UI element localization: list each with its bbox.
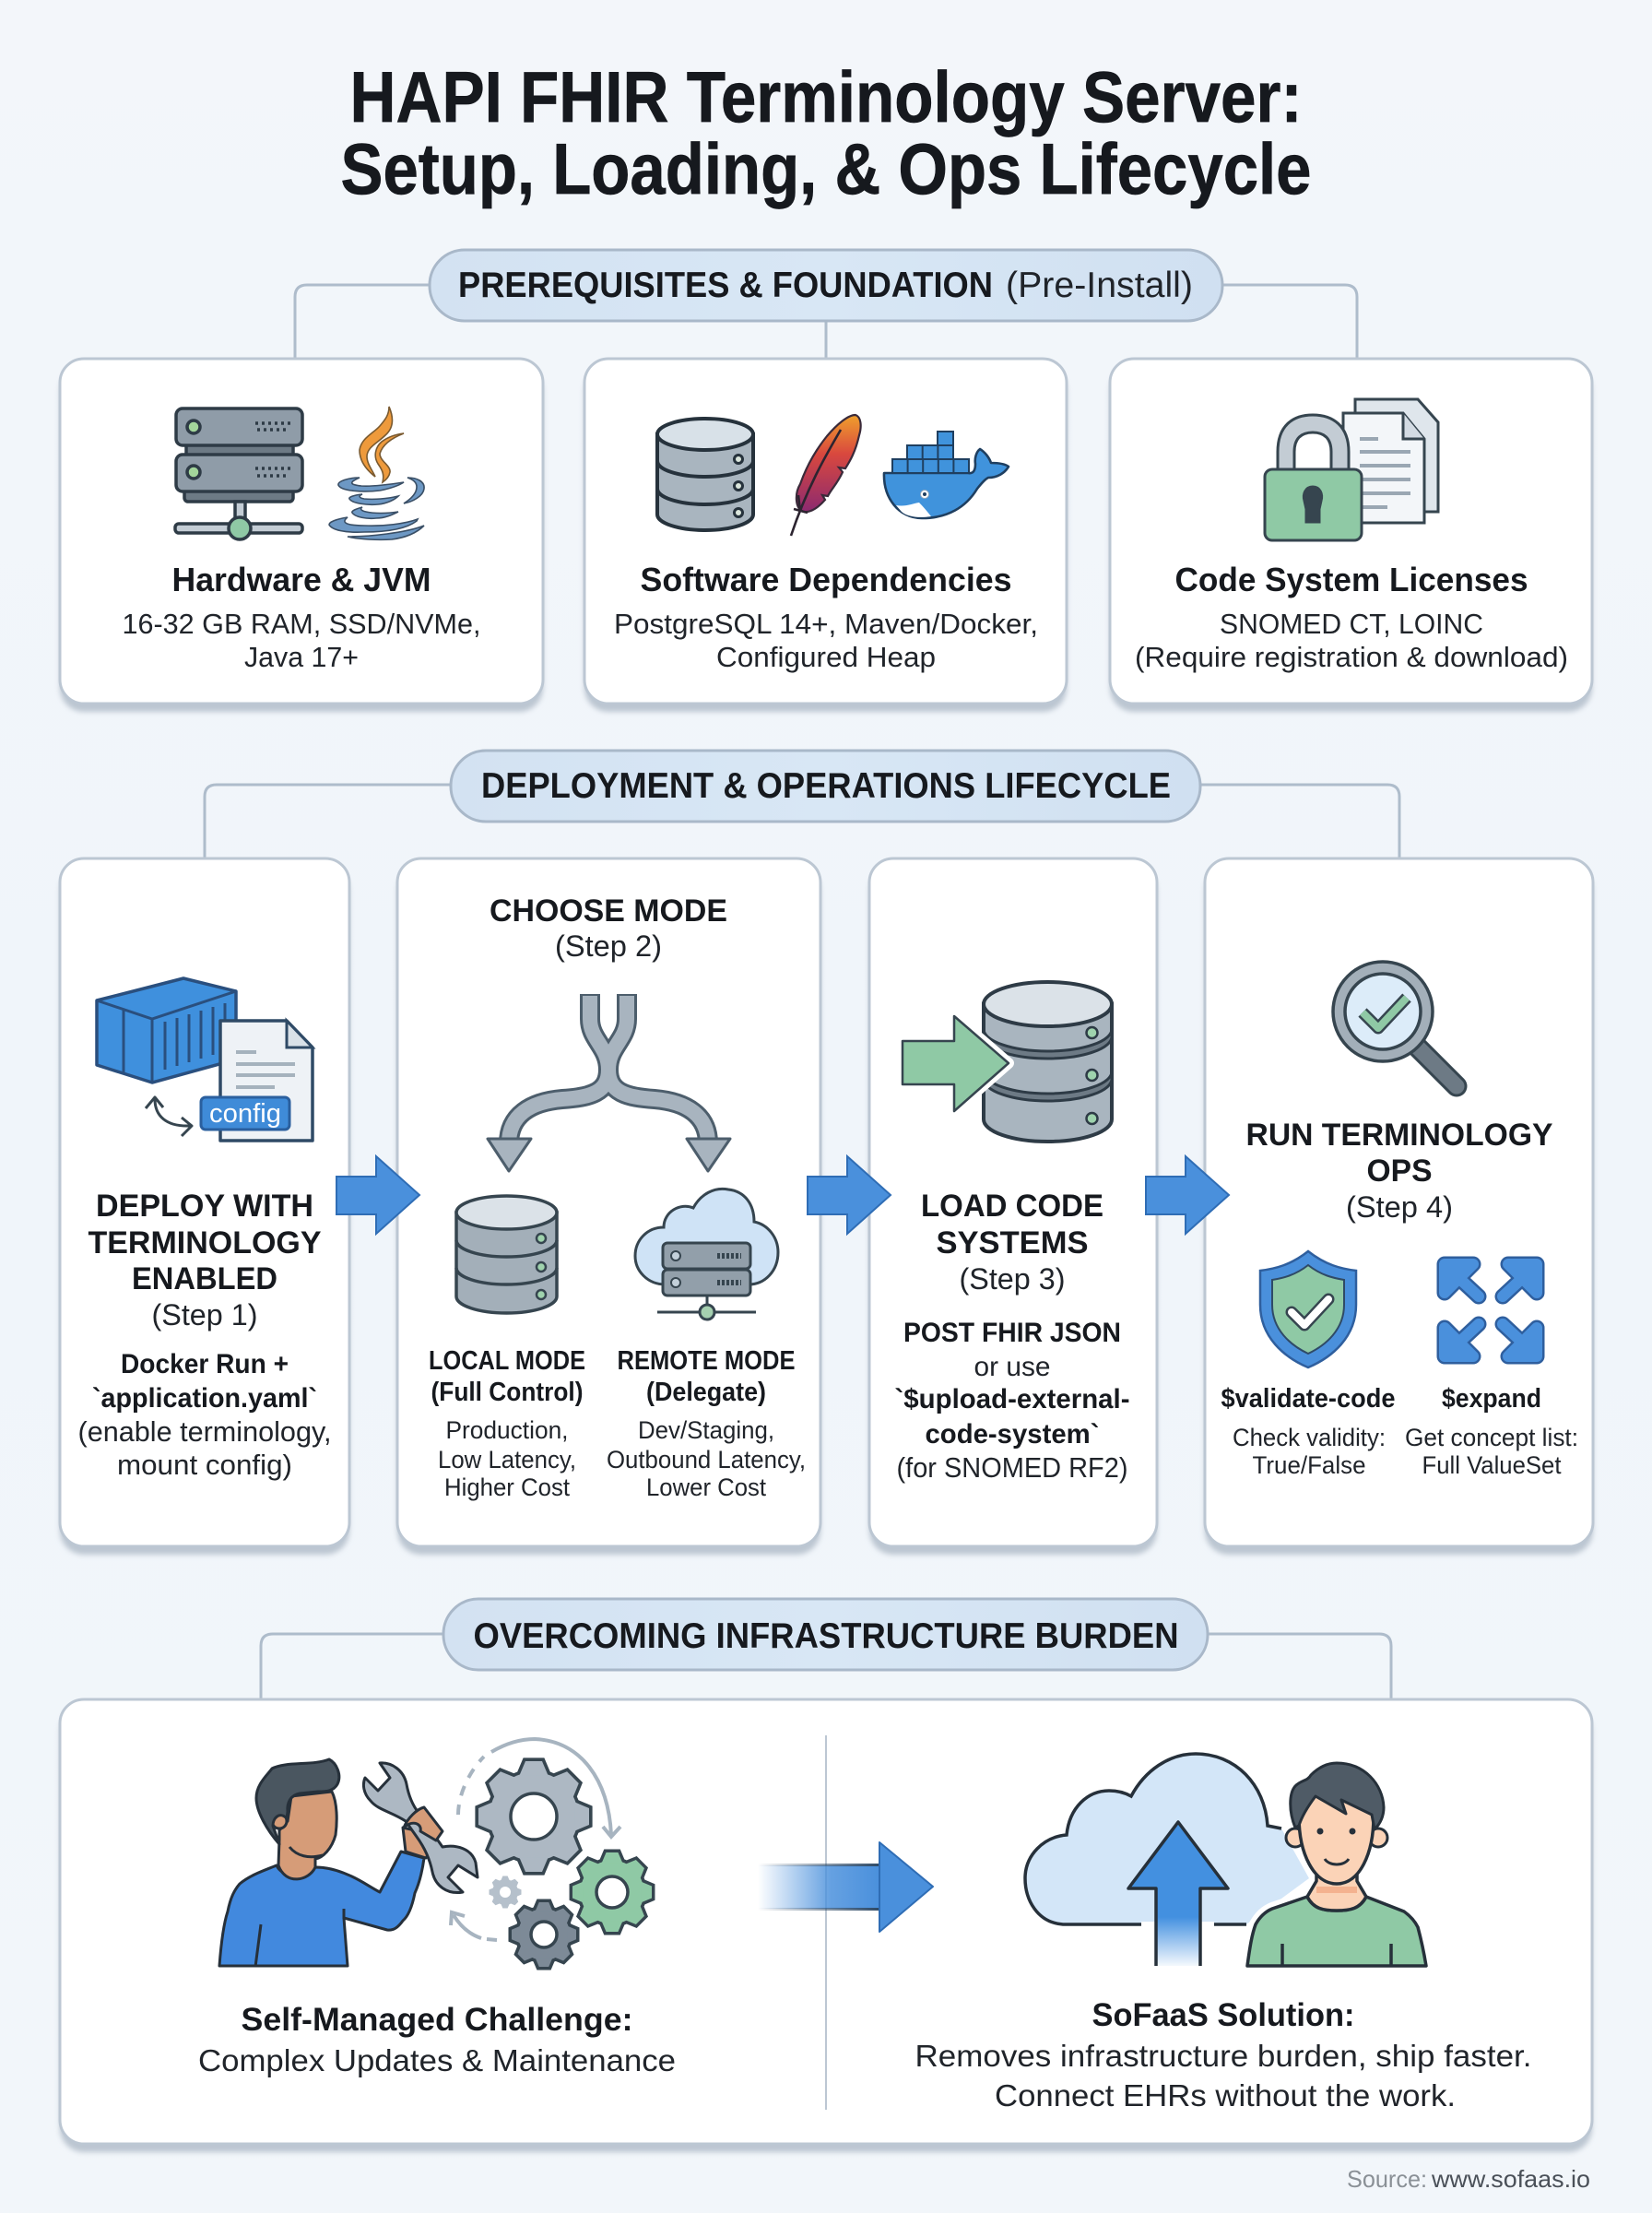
card text: remote mode [607, 1346, 806, 1501]
card heading: choose mode [490, 893, 727, 963]
source credit: Source: [1347, 2165, 1427, 2193]
text: self-managed challenge: Complex Updates & Maintenance [198, 2043, 676, 2077]
icon: expand arrows [1445, 1264, 1537, 1356]
connector: prerequisites [295, 285, 1357, 359]
text: SoFaaS solution [914, 1997, 1532, 2112]
card text: deploy: DEPLOY WITH [96, 1189, 313, 1224]
arrow: challenge to solution [758, 1842, 933, 1932]
card text: software [614, 561, 1038, 673]
icon: padlock [1265, 415, 1362, 540]
card text: load: code-system` [926, 1419, 1099, 1450]
icon: forked arrow [488, 994, 730, 1171]
card heading: choose mode: CHOOSE MODE [490, 893, 727, 929]
card text: load [894, 1189, 1130, 1484]
arrow: step 2 to 3 [808, 1156, 891, 1234]
card text: software: PostgreSQL 14+, Maven/Docker, [614, 608, 1038, 640]
icon: documents [1343, 399, 1438, 523]
card text: local mode: (Full Control) [431, 1378, 583, 1407]
icon: docker whale [884, 432, 1009, 518]
card text: local mode: Higher Cost [444, 1473, 570, 1501]
card text: expand [1405, 1384, 1578, 1479]
card text: hardware: Java 17+ [244, 641, 359, 673]
heading: prerequisites pill [430, 250, 1222, 321]
connector: infrastructure [261, 1634, 1391, 1699]
text: SoFaaS solution: Connect EHRs without the work. [995, 2078, 1456, 2112]
card text: load: or use [974, 1352, 1051, 1382]
card text: local mode [429, 1346, 585, 1501]
icon: person with wrench [219, 1759, 478, 1967]
panel: step 4 run terminology ops [1205, 858, 1593, 1555]
title: Setup, Loading, & Ops Lifecycle [341, 128, 1311, 209]
panel: infrastructure burden [60, 1699, 1592, 2152]
card text: deploy: (enable terminology, [77, 1415, 332, 1448]
card heading: run ops: (Step 4) [1346, 1190, 1453, 1224]
icon: cloud with upload arrow [1025, 1754, 1309, 1966]
card text: remote mode: REMOTE MODE [618, 1346, 795, 1376]
icon: maintenance gears [451, 1739, 652, 1967]
card text: licenses [1135, 561, 1568, 673]
title [341, 56, 1311, 209]
card heading: run ops: RUN TERMINOLOGY [1246, 1118, 1553, 1153]
heading: infrastructure pill: OVERCOMING INFRASTRUCTURE BURDEN [474, 1616, 1178, 1656]
card text: load: (for SNOMED RF2) [896, 1451, 1128, 1484]
card text: load: LOAD CODE [921, 1189, 1103, 1224]
card text: deploy: (Step 1) [151, 1298, 258, 1331]
card text: deploy [77, 1189, 332, 1481]
card text: remote mode: (Delegate) [646, 1378, 766, 1407]
icon: java [329, 407, 424, 539]
card heading: run ops: OPS [1366, 1154, 1433, 1189]
card text: deploy: mount config) [117, 1449, 292, 1481]
icon: happy person [1247, 1763, 1426, 1966]
card text: licenses: SNOMED CT, LOINC [1220, 608, 1483, 640]
card text: hardware [122, 561, 481, 673]
icon: remote cloud server [635, 1189, 778, 1320]
text: SoFaaS solution: Removes infrastructure burden, ship faster. [914, 2039, 1532, 2073]
card text: remote mode: Outbound Latency, [607, 1446, 806, 1473]
card text: deploy: `application.yaml` [92, 1383, 317, 1414]
icon: local database [456, 1196, 557, 1313]
card text: load: POST FHIR JSON [903, 1318, 1121, 1348]
icon: container with config: config [209, 1099, 281, 1129]
card text: load: SYSTEMS [937, 1225, 1088, 1260]
card text: hardware: Hardware & JVM [171, 561, 431, 598]
card text: remote mode: Dev/Staging, [638, 1416, 774, 1444]
card text: remote mode: Lower Cost [646, 1473, 766, 1501]
text: SoFaaS solution: SoFaaS Solution: [1092, 1997, 1355, 2033]
card text: local mode: Production, [446, 1416, 568, 1444]
connector: lifecycle [205, 785, 1399, 858]
card text: hardware: 16-32 GB RAM, SSD/NVMe, [122, 608, 481, 640]
card heading: choose mode: (Step 2) [555, 929, 662, 963]
card text: deploy: ENABLED [132, 1261, 277, 1296]
text: self-managed challenge [198, 2002, 676, 2077]
card text: licenses: Code System Licenses [1174, 561, 1528, 598]
heading: lifecycle pill [451, 751, 1200, 822]
panel: hardware and JVM [60, 359, 543, 712]
heading: lifecycle pill: DEPLOYMENT & OPERATIONS LIFECYCLE [481, 766, 1171, 806]
card text: validate-code: $validate-code [1221, 1384, 1396, 1414]
card text: load: (Step 3) [959, 1262, 1066, 1296]
icon: shield [1260, 1251, 1356, 1367]
heading: infrastructure pill [443, 1599, 1208, 1670]
title: HAPI FHIR Terminology Server: [350, 56, 1302, 137]
card text: expand: $expand [1442, 1384, 1541, 1414]
icon: database [657, 419, 753, 530]
arrow: step 3 to 4 [1146, 1156, 1229, 1234]
panel: step 1 deploy [60, 858, 349, 1555]
card text: software: Software Dependencies [640, 561, 1012, 598]
card text: local mode: Low Latency, [438, 1446, 576, 1473]
panel: step 3 load code systems [869, 858, 1157, 1555]
card text: software: Configured Heap [716, 641, 936, 673]
card text: load: `$upload-external- [894, 1384, 1130, 1414]
arrow: step 1 to 2 [336, 1156, 419, 1234]
text: self-managed challenge: Self-Managed Challenge: [242, 2002, 632, 2038]
heading: prerequisites pill: PREREQUISITES & FOUNDATION [458, 266, 993, 305]
icon: container with config [97, 978, 313, 1141]
icon: server [175, 408, 302, 539]
card text: validate-code [1221, 1384, 1396, 1479]
icon: load into database [903, 982, 1112, 1142]
panel: software dependencies [584, 359, 1067, 712]
card text: validate-code: True/False [1252, 1451, 1366, 1479]
card text: licenses: (Require registration & download) [1135, 641, 1568, 673]
card text: validate-code: Check validity: [1233, 1424, 1386, 1451]
heading: prerequisites pill: (Pre-Install) [1006, 266, 1193, 305]
icon: magnifier [1333, 962, 1457, 1086]
panel: step 2 choose mode [397, 858, 820, 1555]
card text: expand: Full ValueSet [1422, 1451, 1562, 1479]
card text: deploy: Docker Run + [121, 1349, 289, 1379]
source credit [1347, 2165, 1590, 2193]
card text: deploy: TERMINOLOGY [88, 1225, 322, 1260]
card text: local mode: LOCAL MODE [429, 1346, 585, 1376]
source credit: www.sofaas.io [1431, 2165, 1590, 2193]
card text: expand: Get concept list: [1405, 1424, 1578, 1451]
icon: feather [791, 415, 861, 536]
panel: code system licenses [1110, 359, 1592, 712]
card heading: run ops [1246, 1118, 1553, 1224]
